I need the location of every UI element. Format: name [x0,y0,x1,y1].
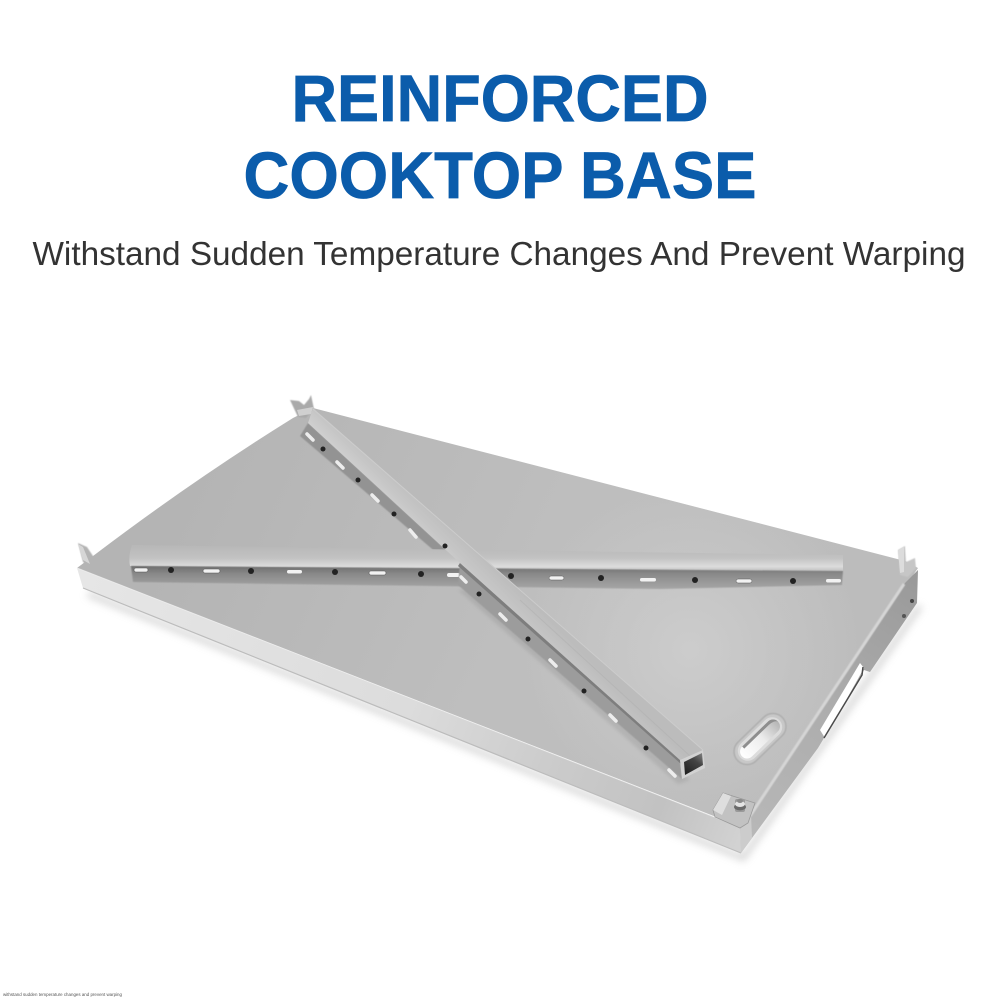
bar shadow [458,590,690,784]
subtitle: Withstand Sudden Temperature Changes And Prevent Warping [32,235,966,272]
bar lit edge [313,409,703,750]
title [244,61,756,212]
wing bracket: right [898,546,916,577]
bar rivets and holes [307,434,675,776]
side handle slot [820,663,864,738]
bar rivets and holes [134,567,841,584]
bar lower side [458,563,682,779]
diagonal bar upper side (passes under horizontal bar) [300,423,460,563]
footer microtext: withstand sudden temperature changes and prevent warping [3,992,122,997]
bar lower flange [131,566,843,589]
front lip [77,568,741,853]
right side flange [740,570,918,853]
bolt bracket [713,793,755,828]
title: REINFORCED [292,61,708,135]
side tab holes [902,599,914,618]
diagonal support bar [307,408,705,784]
plate top surface [77,408,918,827]
wing bracket: left [78,543,97,568]
ground shadow [88,594,920,858]
bar end opening [680,750,705,779]
title: COOKTOP BASE [244,138,756,212]
product photo: stainless steel cooktop base [77,395,920,858]
bar top face [308,408,703,760]
wing bracket: top [290,395,314,418]
oval plate slot [729,708,791,770]
bar top face [129,545,843,571]
horizontal support bar [129,545,843,589]
